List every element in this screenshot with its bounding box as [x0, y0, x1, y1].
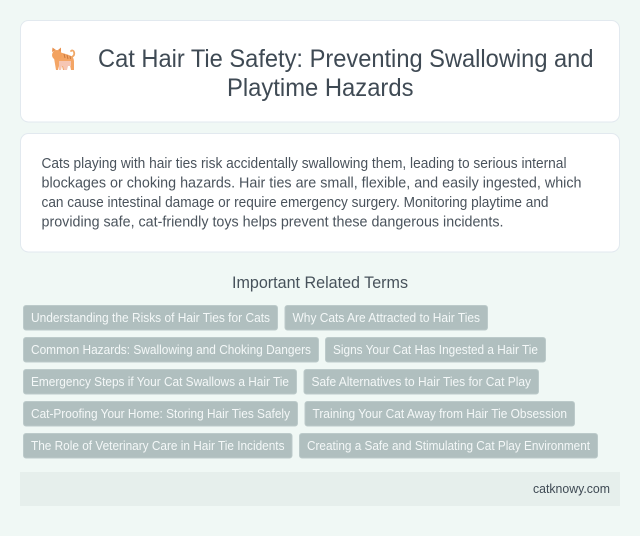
icon: cat	[52, 48, 74, 70]
panel: title card	[20, 20, 620, 122]
panel: summary card	[20, 134, 620, 252]
tag	[300, 434, 598, 458]
tag	[24, 370, 296, 394]
tag	[304, 370, 538, 394]
title: Cat Hair Tie Safety: Preventing Swallowing and	[98, 45, 594, 73]
summary text: can cause intestinal damage or require emergency surgery. Monitoring playtime and	[42, 194, 548, 211]
tag: Emergency Steps if Your Cat Swallows a Hair Tie	[31, 374, 289, 389]
tag: Training Your Cat Away from Hair Tie Obsession	[312, 406, 567, 421]
tag: Signs Your Cat Has Ingested a Hair Tie	[333, 342, 538, 357]
tag	[326, 338, 546, 362]
footer bar	[20, 472, 620, 506]
tag	[24, 434, 292, 458]
tag	[285, 306, 488, 330]
summary text: blockages or choking hazards. Hair ties are small, flexible, and easily ingested, which	[42, 174, 582, 192]
tag: Common Hazards: Swallowing and Choking Dangers	[31, 342, 311, 357]
tag list	[24, 306, 598, 458]
tag: Cat-Proofing Your Home: Storing Hair Ties Safely	[31, 406, 290, 421]
title: Playtime Hazards	[227, 74, 414, 102]
tag: The Role of Veterinary Care in Hair Tie Incidents	[31, 438, 285, 453]
tag: Safe Alternatives to Hair Ties for Cat Play	[312, 374, 531, 389]
heading: important related terms: Important Related Terms	[232, 274, 408, 292]
summary text	[42, 155, 582, 230]
tag: Creating a Safe and Stimulating Cat Play Environment	[307, 438, 590, 453]
footer source: catknowy.com	[533, 481, 610, 496]
tag	[24, 306, 278, 330]
tag: Why Cats Are Attracted to Hair Ties	[292, 310, 480, 325]
tag	[24, 338, 318, 362]
tag	[24, 402, 298, 426]
title	[98, 45, 594, 102]
summary text: providing safe, cat-friendly toys helps prevent these dangerous incidents.	[42, 214, 504, 230]
tag: Understanding the Risks of Hair Ties for Cats	[31, 310, 270, 325]
summary text: Cats playing with hair ties risk accidentally swallowing them, leading to serious internal	[42, 155, 566, 172]
tag	[305, 402, 574, 426]
